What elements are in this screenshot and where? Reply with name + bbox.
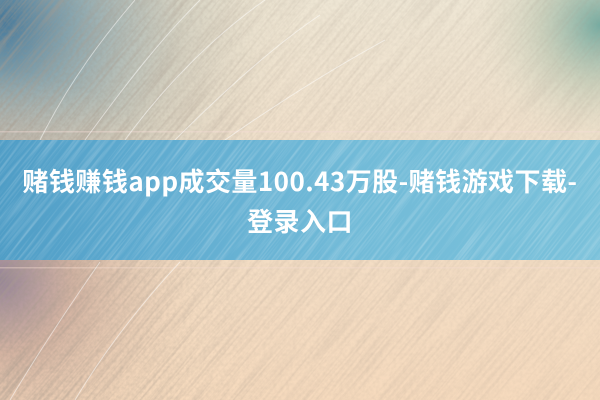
title text: 赌钱赚钱app成交量100.43万股-赌钱游戏下载- xyxy=(23,162,577,199)
title band xyxy=(0,140,600,260)
title text: 登录入口 xyxy=(247,202,353,239)
title text xyxy=(23,162,577,239)
